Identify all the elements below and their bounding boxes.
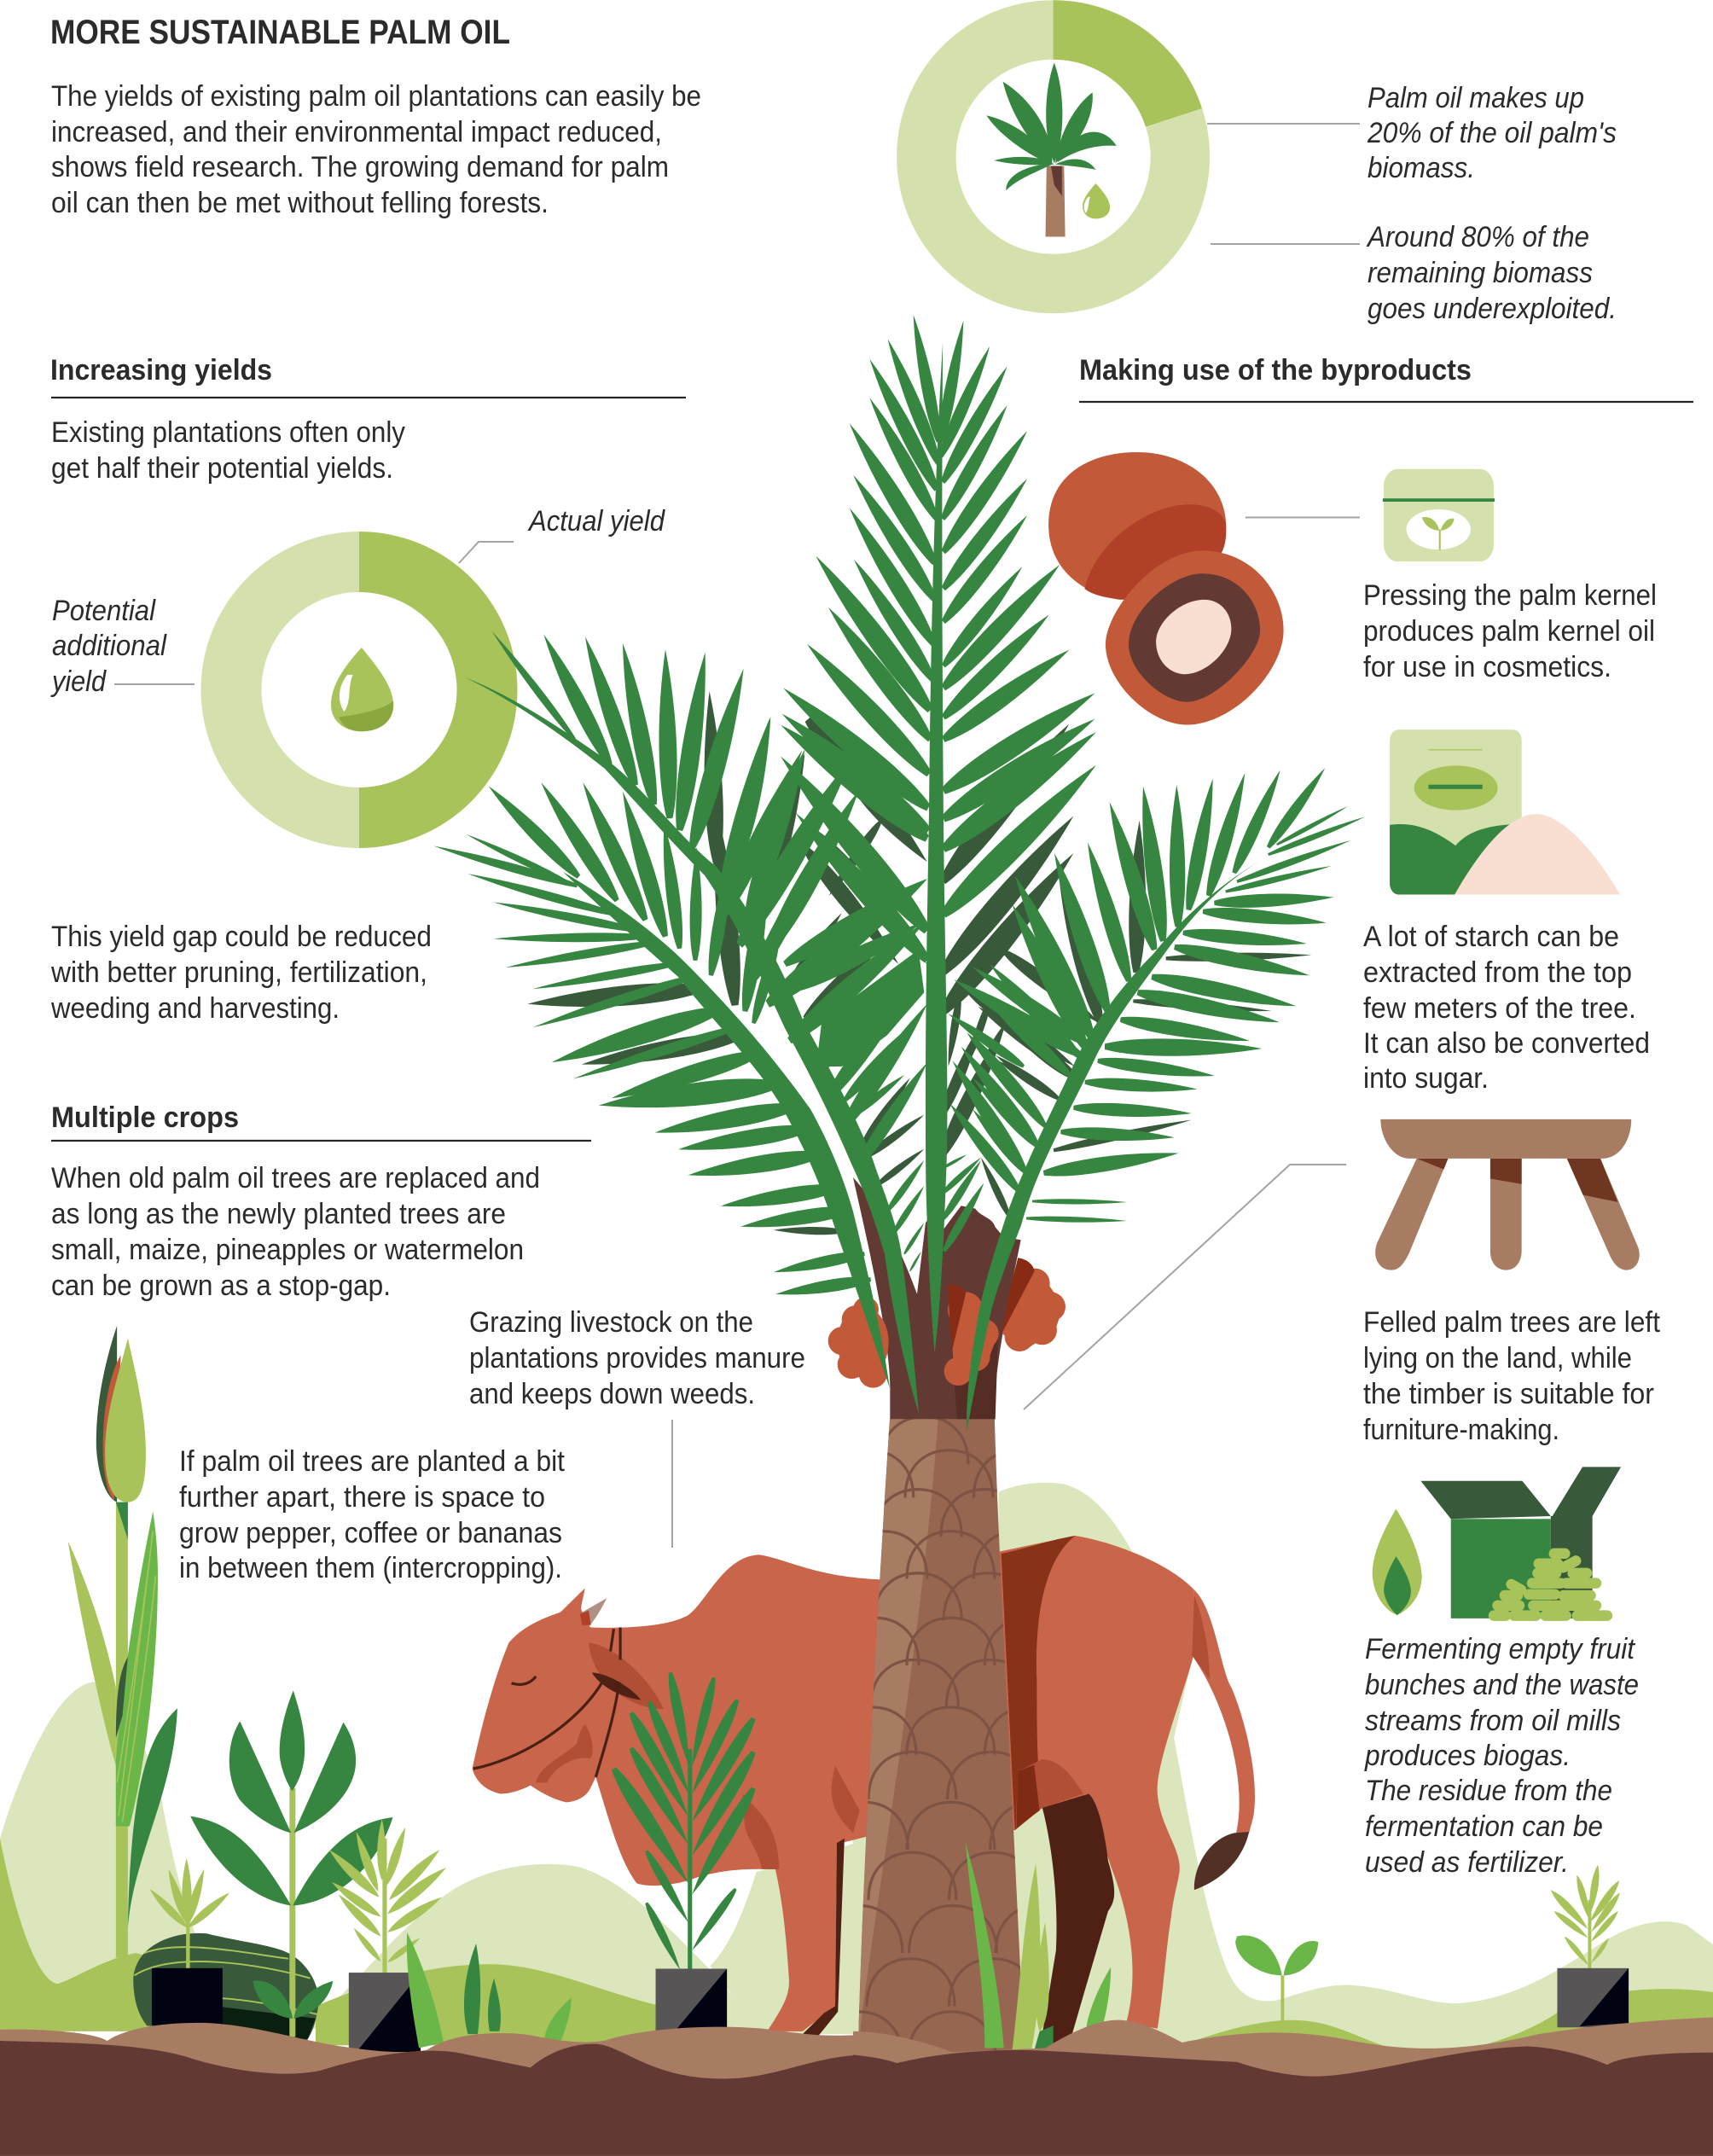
text: biogas and fertilizer: Fermenting empty fruit: [1365, 1633, 1635, 1665]
crops: light sapling with pot: [326, 1819, 450, 2052]
donut caption: remaining biomass: Around 80% of the: [1366, 221, 1589, 253]
text: intercropping: [179, 1445, 566, 1584]
icon: wooden stool: [1375, 1119, 1640, 1270]
fronds: lower-left frond leaflets: [433, 691, 787, 1107]
text: biogas and fertilizer: fermentation can be: [1365, 1810, 1603, 1843]
text: existing plantations: get half their potential yields.: [51, 452, 393, 485]
icon: palm fruit: [1048, 452, 1284, 725]
cow: [473, 1536, 1255, 2051]
label: actual yield: Actual yield: [527, 505, 665, 538]
intro text block: The yields of existing palm oil plantations can easily be: [51, 80, 701, 113]
fronds: dark leaflets behind, lower centre: [774, 1020, 1072, 1235]
fronds: dark leaflets behind, centre: [746, 713, 1105, 1072]
leader lines: [114, 124, 1360, 1548]
text: starch: few meters of the tree.: [1363, 992, 1636, 1025]
heading: multiple crops: Multiple crops: [51, 1101, 239, 1134]
text: existing plantations: Existing plantations often only: [51, 416, 405, 449]
label: potential additional yield: Potential: [52, 595, 156, 627]
text: biogas and fertilizer: [1364, 1633, 1639, 1879]
donut caption: remaining biomass: goes underexploited.: [1367, 293, 1617, 325]
text: intercropping: If palm oil trees are planted a bit: [179, 1445, 566, 1478]
cow: hindquarters and tail: [963, 1536, 1255, 2051]
text: intercropping: in between them (intercropping).: [179, 1552, 562, 1584]
fronds: right frond leaflets: [967, 764, 1366, 1223]
text: felled palm timber: lying on the land, while: [1363, 1342, 1632, 1374]
cow: head and front body: [473, 1555, 892, 2038]
donut caption: remaining biomass: remaining biomass: [1367, 257, 1593, 289]
label: potential additional yield: additional: [52, 630, 167, 662]
icon: cosmetics jar: [1383, 469, 1495, 561]
donut caption: palm oil share: 20% of the oil palm's: [1367, 117, 1617, 149]
text: yield gap: This yield gap could be reduced: [51, 921, 432, 953]
text: stop-gap crops: can be grown as a stop-gap.: [51, 1270, 391, 1302]
crops: corn plant: [68, 1326, 177, 1957]
icon: fertilizer box and pellets: [1420, 1467, 1621, 1618]
donut caption: palm oil share: Palm oil makes up: [1367, 82, 1584, 114]
text: palm kernel oil: produces palm kernel oil: [1363, 615, 1655, 648]
text: stop-gap crops: When old palm oil trees are replaced and: [51, 1162, 540, 1194]
text: starch: It can also be converted: [1363, 1027, 1650, 1060]
text: biogas and fertilizer: used as fertilizer.: [1365, 1846, 1569, 1879]
text: biogas and fertilizer: streams from oil mills: [1365, 1705, 1621, 1737]
crops: green sprout: [1235, 1935, 1318, 2021]
text: biogas and fertilizer: bunches and the waste: [1365, 1669, 1639, 1701]
intro text block: shows field research. The growing demand for palm: [51, 151, 669, 183]
text: palm kernel oil: [1363, 579, 1657, 683]
crops: broad-leaf plant: [190, 1690, 392, 2037]
text: grazing livestock: [469, 1306, 805, 1410]
donut caption: palm oil share: biomass.: [1367, 152, 1475, 184]
label: potential additional yield: [50, 595, 167, 698]
crops: plants at trunk base: [966, 1843, 1111, 2051]
text: grazing livestock: Grazing livestock on the: [469, 1306, 753, 1339]
fruit bunches: [828, 1260, 1066, 1388]
intro text block: oil can then be met without felling forests.: [51, 187, 549, 219]
text: biogas and fertilizer: The residue from the: [1365, 1775, 1612, 1807]
heading: making use of the byproducts: Making use of the byproducts: [1079, 354, 1472, 386]
fronds: upper-left frond leaflets: [489, 629, 753, 850]
text: palm kernel oil: Pressing the palm kernel: [1363, 579, 1657, 612]
text: felled palm timber: furniture-making.: [1363, 1414, 1559, 1446]
text: biogas and fertilizer: produces biogas.: [1364, 1740, 1571, 1772]
text: palm kernel oil: for use in cosmetics.: [1363, 651, 1611, 683]
text: stop-gap crops: [51, 1162, 540, 1302]
donut chart: actual versus potential yield: [201, 532, 517, 848]
fronds: rachises of left and right fronds: [465, 677, 1269, 1433]
donut chart: oil share of biomass: [897, 0, 1210, 313]
text: starch: A lot of starch can be: [1363, 921, 1619, 953]
label: potential additional yield: yield: [50, 665, 107, 698]
text: existing plantations: [51, 416, 405, 485]
text: intercropping: grow pepper, coffee or bananas: [179, 1517, 562, 1549]
crops: right sapling with pot: [1548, 1864, 1629, 2027]
fronds: central frond: [775, 313, 1103, 1353]
text: starch: extracted from the top: [1363, 956, 1632, 989]
landscape: background hills: [0, 1483, 1713, 2062]
fronds: centre fan leaflets: [729, 715, 1090, 1071]
title: MORE SUSTAINABLE PALM OIL: [50, 14, 510, 51]
crops: grass blades: [407, 1932, 572, 2048]
intro text block: increased, and their environmental impact reduced,: [51, 116, 662, 148]
text: intercropping: further apart, there is space to: [179, 1481, 545, 1514]
intro text block: [51, 80, 701, 219]
fronds: lower centre fan leaflets: [840, 1020, 1048, 1272]
text: yield gap: [50, 921, 432, 1025]
icon: palm tree with oil drop: [986, 62, 1117, 236]
text: starch: [1363, 921, 1650, 1095]
donut caption: palm oil share: [1367, 82, 1617, 184]
heading: increasing yields: Increasing yields: [50, 354, 272, 386]
text: felled palm timber: [1363, 1306, 1661, 1446]
palm fronds: [433, 313, 1366, 1433]
text: yield gap: weeding and harvesting.: [50, 992, 340, 1025]
crops: watermelon and left sapling with black pot: [133, 1858, 319, 2040]
ground: soil layers: [0, 2017, 1713, 2156]
icon: biogas flame: [1373, 1509, 1422, 1615]
text: grazing livestock: and keeps down weeds.: [469, 1378, 755, 1410]
text: yield gap: with better pruning, fertilization,: [50, 956, 427, 989]
crops: palm sapling with pot: [607, 1671, 759, 2031]
fronds: middle and lower leaflets: [598, 716, 935, 1300]
icon: oil drop: [331, 648, 393, 731]
icon: starch packet and mound: [1390, 729, 1620, 895]
text: felled palm timber: Felled palm trees are left: [1363, 1306, 1661, 1339]
text: felled palm timber: the timber is suitable for: [1363, 1378, 1654, 1410]
text: stop-gap crops: as long as the newly planted trees are: [51, 1198, 506, 1230]
donut caption: remaining biomass: [1366, 221, 1617, 325]
palm tree trunk: [858, 1418, 1020, 2053]
text: starch: into sugar.: [1363, 1062, 1489, 1095]
text: grazing livestock: plantations provides manure: [469, 1342, 805, 1374]
trunk crown: brown frond bases and fruit bunches: [828, 1177, 1066, 1419]
text: stop-gap crops: small, maize, pineapples or watermelon: [51, 1234, 524, 1266]
